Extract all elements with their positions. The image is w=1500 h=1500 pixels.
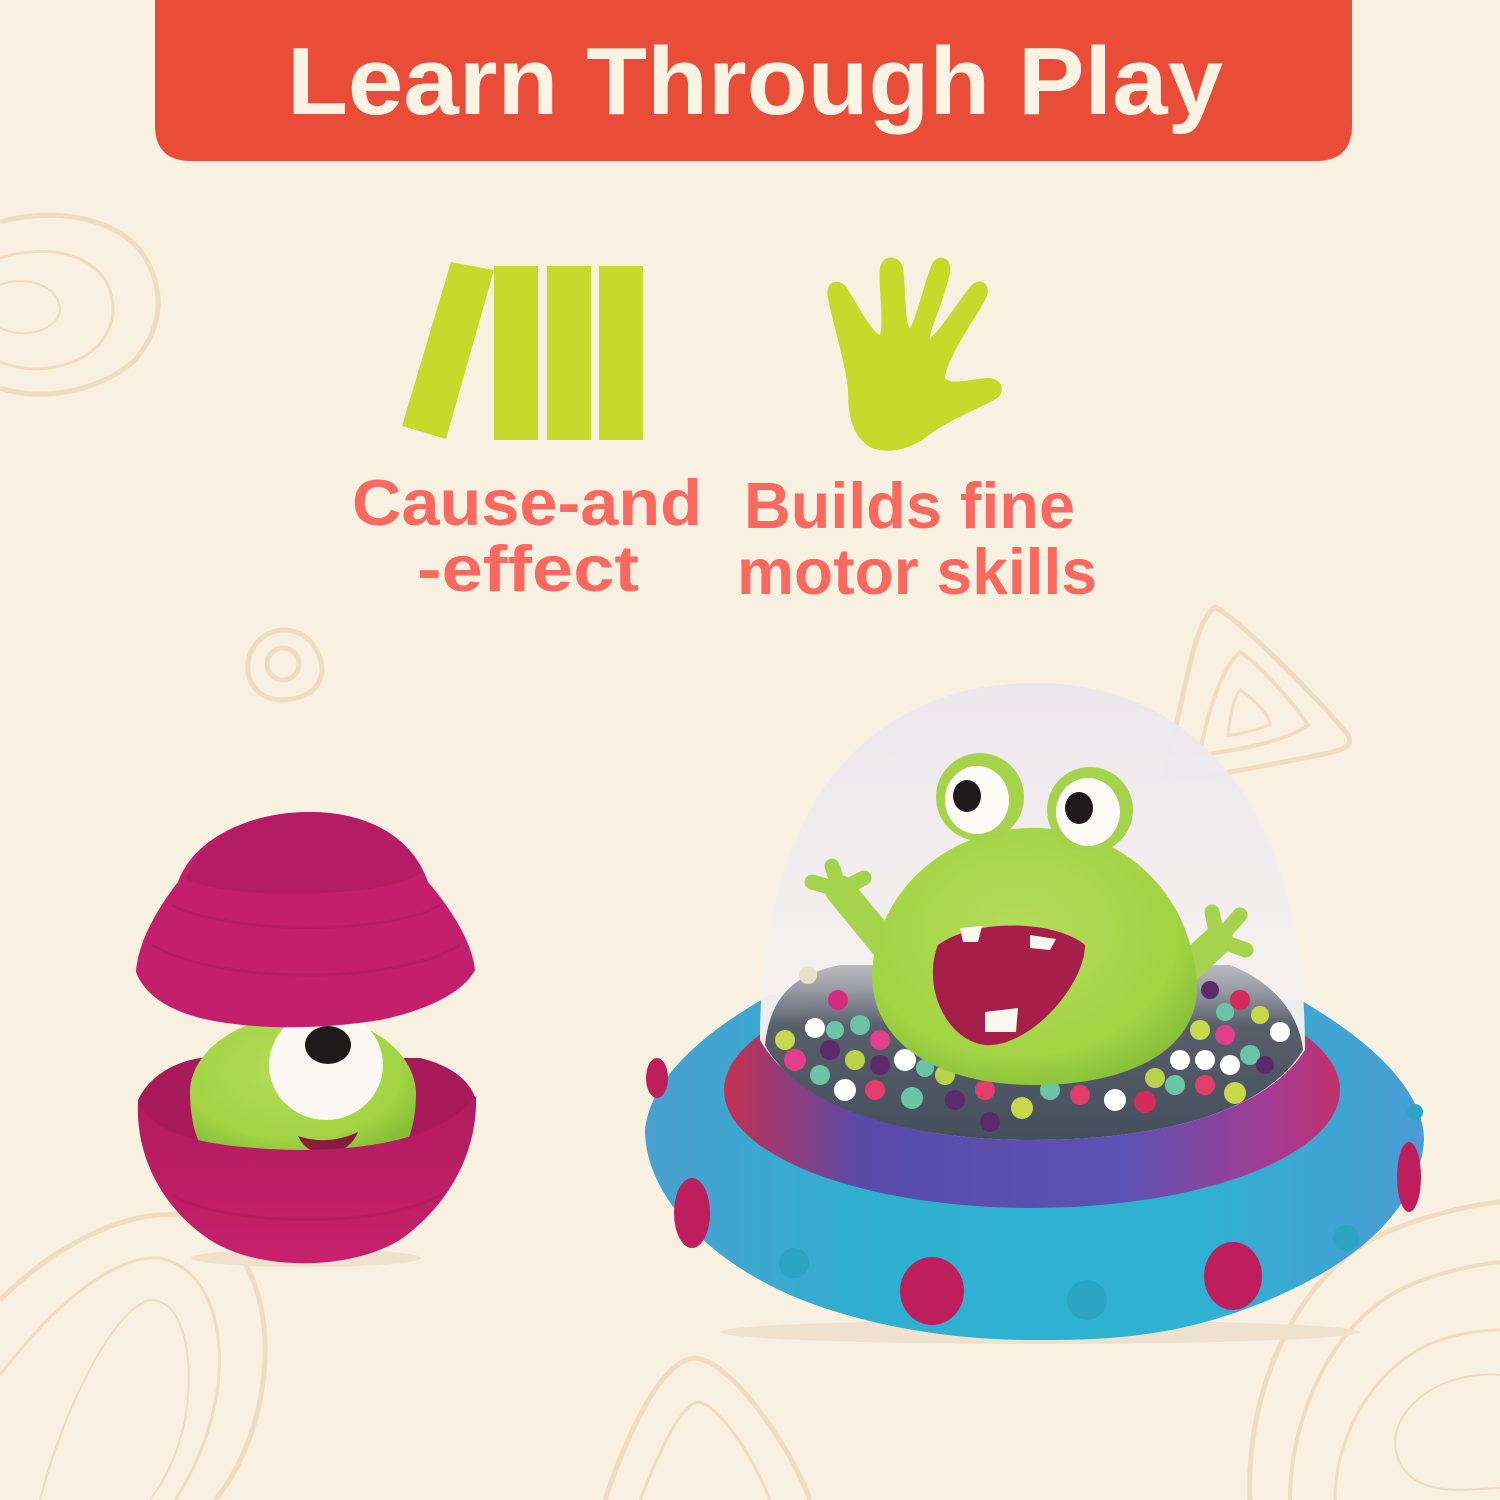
- title banner: [155, 0, 1352, 161]
- decorative contour: triangle right: [1165, 607, 1350, 780]
- saucer bumps: [646, 1058, 1421, 1325]
- text: cause-and-effect: -effect: [417, 532, 639, 605]
- monster arms: [812, 866, 1246, 975]
- lower shell front: [138, 1096, 476, 1263]
- toy: magenta ball with one-eyed alien: [136, 812, 476, 1267]
- saucer tray: [765, 965, 1303, 1140]
- upper shell: [136, 812, 475, 1027]
- dome: [760, 683, 1305, 1140]
- saucer small bumps: [779, 1104, 1423, 1320]
- alien mouth: [298, 1132, 358, 1154]
- monster body: [872, 828, 1197, 1085]
- tray beads: [775, 966, 1290, 1132]
- decorative contour: top left: [0, 215, 158, 394]
- monster eyes: [936, 753, 1024, 841]
- toy: flying saucer with green monster: [645, 683, 1424, 1344]
- title: Learn Through Play: [287, 28, 1223, 135]
- shell cap: [186, 812, 422, 894]
- monster mouth: [933, 925, 1085, 1045]
- decorative contour: bottom centre: [605, 1358, 810, 1500]
- decorative contour: small centre left: [248, 630, 322, 700]
- text: builds fine motor skills: Builds fine: [744, 469, 1075, 542]
- saucer ring: [645, 995, 1424, 1340]
- icon: books: [402, 262, 643, 440]
- alien eye: [269, 1010, 383, 1120]
- text: builds fine motor skills: motor skills: [737, 535, 1097, 608]
- decorative contour: bottom left: [0, 1215, 265, 1500]
- icon: hand: [827, 258, 1002, 451]
- lower shell back: [138, 1058, 476, 1160]
- decorative contour: bottom right: [1250, 1202, 1500, 1500]
- text: cause-and-effect: Cause-and: [352, 466, 702, 539]
- saucer inner ring: [724, 972, 1340, 1208]
- alien body: [190, 1015, 416, 1155]
- shell ridges: [152, 905, 460, 1220]
